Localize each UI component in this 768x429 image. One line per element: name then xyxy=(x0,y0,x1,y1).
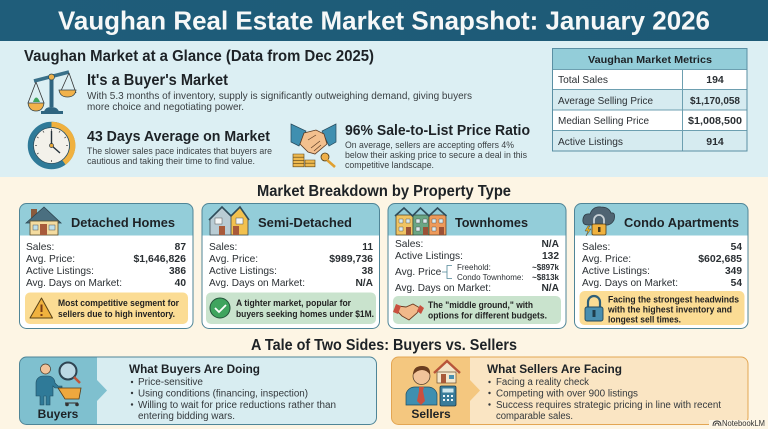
stats: condo apartments: Avg. Days on Market: xyxy=(582,278,678,289)
callout: townhomes: The "middle ground," with xyxy=(428,300,533,310)
panel: market at a glance xyxy=(0,41,768,177)
table: market metrics: Vaughan Market Metrics xyxy=(588,54,712,66)
label: buyers: Buyers xyxy=(38,407,79,421)
stats: condo apartments: 54 xyxy=(731,278,742,289)
text: what buyers are doing: Willing to wait for price reductions rather than xyxy=(138,400,336,411)
text: what buyers are doing: What Buyers Are Doing xyxy=(129,362,260,376)
stats: semi-detached: Sales: xyxy=(209,242,237,253)
stats: detached homes: $1,646,826 xyxy=(133,253,186,265)
panel: detached homes xyxy=(20,204,193,328)
stats: detached homes xyxy=(26,242,186,289)
stats: townhomes: Condo Townhome: xyxy=(457,273,524,282)
stats: townhomes: ~$813k xyxy=(532,273,560,282)
icon: clock xyxy=(30,124,73,166)
icon: scales xyxy=(28,72,76,114)
stats: condo apartments: Sales: xyxy=(582,242,610,253)
text: what buyers are doing xyxy=(129,362,336,422)
stats: condo apartments: Active Listings: xyxy=(582,266,650,277)
text: buyer's market: With 5.3 months of inventory, supply is significantly outweighing demand, giving buyers xyxy=(87,90,472,102)
heading: tale of two sides: A Tale of Two Sides: Buyers vs. Sellers xyxy=(251,337,517,354)
text: sale-to-list ratio xyxy=(345,122,530,170)
watermark: NotebookLM: NotebookLM xyxy=(722,419,765,428)
callout: condo apartments: longest sell times. xyxy=(608,314,681,324)
text: what buyers are doing: Using conditions (financing, inspection) xyxy=(138,388,308,400)
text: buyer's market: It's a Buyer's Market xyxy=(87,72,228,89)
heading: townhomes: Townhomes xyxy=(455,215,528,230)
stats: detached homes: Sales: xyxy=(26,242,54,253)
icon: detached house xyxy=(26,207,61,235)
table: market metrics xyxy=(552,48,747,151)
stats: condo apartments: 349 xyxy=(725,266,742,277)
callout: semi-detached xyxy=(206,292,376,324)
text: sale-to-list ratio: On average, sellers are accepting offers 4% xyxy=(345,140,514,150)
stats: condo apartments xyxy=(582,242,742,289)
stats: semi-detached: $989,736 xyxy=(329,253,373,265)
panel: townhomes xyxy=(388,204,566,328)
heading: condo apartments: Condo Apartments xyxy=(624,215,739,230)
callout: semi-detached: buyers seeking homes under $1M. xyxy=(236,309,374,319)
callout: townhomes xyxy=(393,296,561,324)
text: sale-to-list ratio: 96% Sale-to-List Price Ratio xyxy=(345,122,530,139)
table: market metrics: 914 xyxy=(706,136,724,148)
text: what sellers are facing: comparable sales. xyxy=(496,411,573,422)
table: market metrics: Average Selling Price xyxy=(558,95,653,107)
text: what buyers are doing: entering bidding wars. xyxy=(138,411,235,422)
heading: market breakdown: Market Breakdown by Property Type xyxy=(257,183,511,200)
icon: townhomes row xyxy=(395,208,446,235)
table: market metrics: 194 xyxy=(706,74,724,86)
text: what sellers are facing: Facing a reality check xyxy=(496,377,590,388)
stats: detached homes: 40 xyxy=(175,278,186,289)
text: sale-to-list ratio: competitive landscape. xyxy=(345,160,434,170)
callout: semi-detached: A tighter market, popular for xyxy=(236,298,352,308)
heading: detached homes: Detached Homes xyxy=(71,215,175,230)
stats: condo apartments: $602,685 xyxy=(698,253,742,265)
stats: townhomes: Freehold: xyxy=(457,263,491,272)
icon: seller with house and calculator xyxy=(406,361,460,406)
callout: detached homes: sellers due to high inventory. xyxy=(58,309,175,319)
text: what sellers are facing xyxy=(487,362,721,422)
text: buyer's market xyxy=(87,72,472,113)
heading: semi-detached: Semi-Detached xyxy=(258,215,352,230)
callout: condo apartments: with the highest inventory and xyxy=(607,304,732,314)
panel: sellers xyxy=(392,357,748,424)
stats: townhomes: Active Listings: xyxy=(395,251,463,262)
stats: semi-detached: Active Listings: xyxy=(209,266,277,277)
callout: condo apartments xyxy=(580,291,744,325)
text: days on market: The slower sales pace indicates that buyers are xyxy=(87,146,272,157)
panel: condo apartments xyxy=(574,204,748,328)
stats: semi-detached xyxy=(209,242,374,289)
heading: glance: Vaughan Market at a Glance (Data from Dec 2025) xyxy=(24,48,374,65)
watermark: NotebookLM xyxy=(709,419,768,429)
text: what sellers are facing: What Sellers Are Facing xyxy=(487,362,622,376)
text: what buyers are doing: Price-sensitive xyxy=(138,377,203,388)
stats: detached homes: 87 xyxy=(175,242,186,253)
callout: detached homes xyxy=(25,292,188,324)
stats: detached homes: Avg. Days on Market: xyxy=(26,278,122,289)
callout: detached homes: Most competitive segment for xyxy=(58,298,180,308)
stats: townhomes xyxy=(395,239,560,294)
text: days on market: cautious and taking their time to find value. xyxy=(87,156,255,167)
stats: townhomes: ~$897k xyxy=(532,263,560,272)
stats: townhomes: 132 xyxy=(542,251,559,262)
table: market metrics: Total Sales xyxy=(558,74,608,86)
icon: storm cloud with lock xyxy=(583,207,615,236)
text: days on market xyxy=(87,128,272,167)
stats: townhomes: N/A xyxy=(541,283,560,294)
text: what sellers are facing: Competing with over 900 listings xyxy=(496,388,638,400)
icon: buyer with cart xyxy=(36,362,81,406)
text: sale-to-list ratio: below their asking price to secure a deal in this xyxy=(345,150,527,160)
label: sellers: Sellers xyxy=(411,407,451,421)
stats: townhomes: Avg. Days on Market: xyxy=(395,283,491,294)
text: buyer's market: more choice and negotiating power. xyxy=(87,101,244,113)
panel: semi-detached xyxy=(202,204,380,328)
title: Vaughan Real Estate Market Snapshot: January 2026 xyxy=(58,6,710,36)
header banner xyxy=(0,0,768,41)
stats: semi-detached: 38 xyxy=(362,266,373,277)
stats: condo apartments: 54 xyxy=(731,242,742,253)
stats: semi-detached: Avg. Days on Market: xyxy=(209,278,305,289)
text: what sellers are facing: Success requires strategic pricing in line with recent xyxy=(496,400,721,411)
stats: townhomes: N/A xyxy=(541,239,560,250)
stats: condo apartments: Avg. Price: xyxy=(582,254,631,265)
icon: semi-detached houses xyxy=(209,207,249,235)
stats: semi-detached: Avg. Price: xyxy=(209,254,258,265)
callout: townhomes: options for different budgets. xyxy=(428,310,547,320)
table: market metrics: $1,170,058 xyxy=(690,95,740,107)
table: market metrics: Median Selling Price xyxy=(558,115,649,127)
stats: semi-detached: 11 xyxy=(362,242,373,253)
stats: detached homes: Avg. Price: xyxy=(26,254,75,265)
table: market metrics: Active Listings xyxy=(558,136,623,148)
table: market metrics: $1,008,500 xyxy=(688,115,742,127)
stats: semi-detached: N/A xyxy=(355,278,374,289)
stats: detached homes: 386 xyxy=(169,266,186,277)
text: days on market: 43 Days Average on Market xyxy=(87,128,270,145)
icon: handshake with keys and coins xyxy=(291,124,336,167)
panel: buyers xyxy=(20,357,376,424)
stats: townhomes: Sales: xyxy=(395,239,423,250)
stats: townhomes: Avg. Price xyxy=(395,267,442,278)
stats: detached homes: Active Listings: xyxy=(26,266,94,277)
callout: condo apartments: Facing the strongest headwinds xyxy=(608,294,739,304)
